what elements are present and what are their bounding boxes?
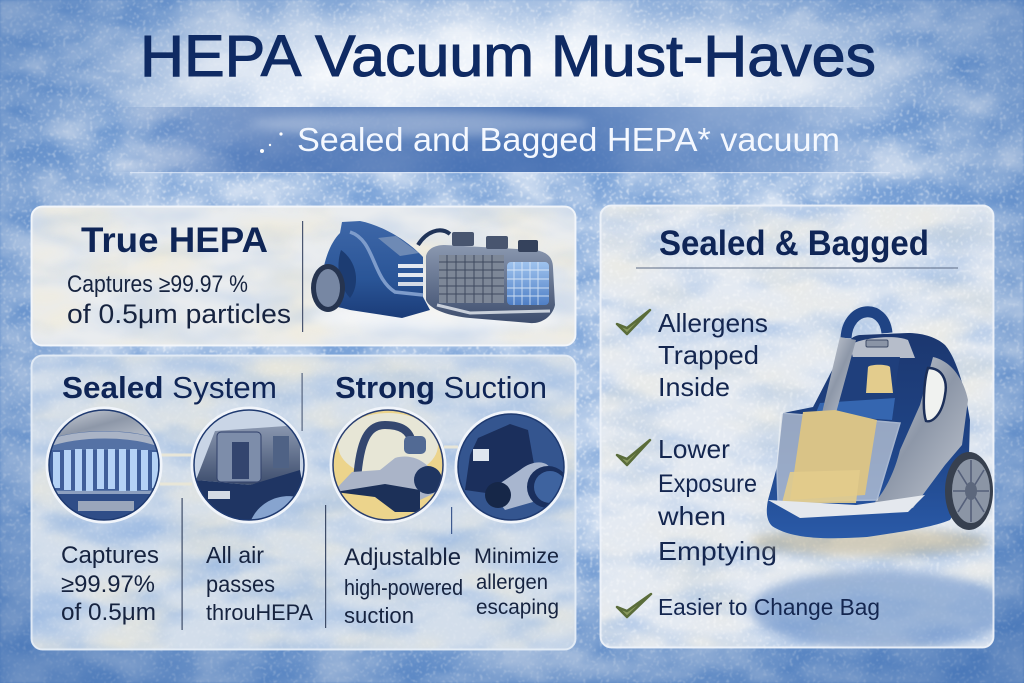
subtitle banner: Sealed and Bagged HEPA* vacuum — [297, 121, 840, 158]
text: All air column: All air — [206, 542, 264, 568]
text: All air column: passes — [206, 571, 275, 597]
icon: check — [617, 310, 650, 334]
text: Adjustable column: Adjustalble — [344, 544, 461, 571]
text: capture rate: Captures ≥99.97 % — [67, 271, 248, 298]
panel: True HEPA — [31, 206, 576, 346]
text: Captures column: Captures — [61, 542, 159, 569]
title: HEPA Vacuum Must-Haves — [140, 24, 876, 89]
text: lower exposure when emptying: Exposure — [658, 470, 757, 498]
panel: Sealed and Bagged — [600, 205, 1010, 650]
icon: canister vacuum circle — [455, 411, 569, 523]
text: Minimize column — [474, 545, 559, 619]
checklist item: lower exposure — [617, 434, 777, 566]
text: allergens trapped inside — [658, 308, 768, 402]
text: All air column — [206, 542, 313, 625]
text: allergens trapped inside: Allergens — [658, 308, 768, 338]
text: lower exposure when emptying: Emptying — [658, 536, 777, 566]
text: Adjustable column: suction — [344, 603, 414, 628]
subtitle banner — [110, 107, 900, 173]
icon: upright suction vacuum circle — [330, 407, 446, 523]
text: Captures column: ≥99.97% — [61, 571, 155, 598]
heading: True HEPA: True HEPA — [81, 221, 268, 260]
text: allergens trapped inside: Trapped — [658, 340, 759, 370]
heading: Strong Suction: Strong Suction — [335, 370, 547, 405]
text: Minimize column: escaping — [476, 596, 559, 619]
icon: sealed housing circle — [191, 407, 310, 525]
text: Captures column: of 0.5μm — [61, 599, 156, 626]
illustration: bagged canister vacuum — [750, 312, 993, 556]
text: allergens trapped inside: Inside — [658, 372, 730, 402]
checklist item: easier to change bag — [617, 594, 880, 620]
heading: Sealed System: Sealed System — [62, 370, 277, 405]
text: capture rate — [67, 271, 291, 329]
text: lower exposure when emptying: when — [657, 501, 726, 531]
text: All air column: throuHEPA — [206, 600, 313, 625]
icon: HEPA filter circle — [46, 407, 162, 523]
text: Minimize column: Minimize — [474, 545, 559, 568]
panel: Sealed System and Strong Suction — [31, 355, 576, 650]
heading: Sealed & Bagged: Sealed & Bagged — [659, 224, 929, 263]
text: Captures column — [61, 542, 159, 626]
text: lower exposure when emptying — [657, 434, 777, 566]
icon: check — [617, 440, 650, 465]
text: Adjustable column — [344, 544, 463, 628]
text: capture rate: of 0.5μm particles — [67, 299, 291, 329]
icon: vacuum with HEPA filter — [310, 221, 560, 330]
checklist item: allergens trapped — [617, 308, 768, 402]
icon: check — [617, 594, 651, 617]
text: Adjustable column: high-powered — [344, 575, 463, 600]
text: lower exposure when emptying: Lower — [658, 434, 730, 464]
text: easier to change bag: Easier to Change Bag — [658, 594, 880, 620]
text: Minimize column: allergen — [476, 571, 548, 594]
